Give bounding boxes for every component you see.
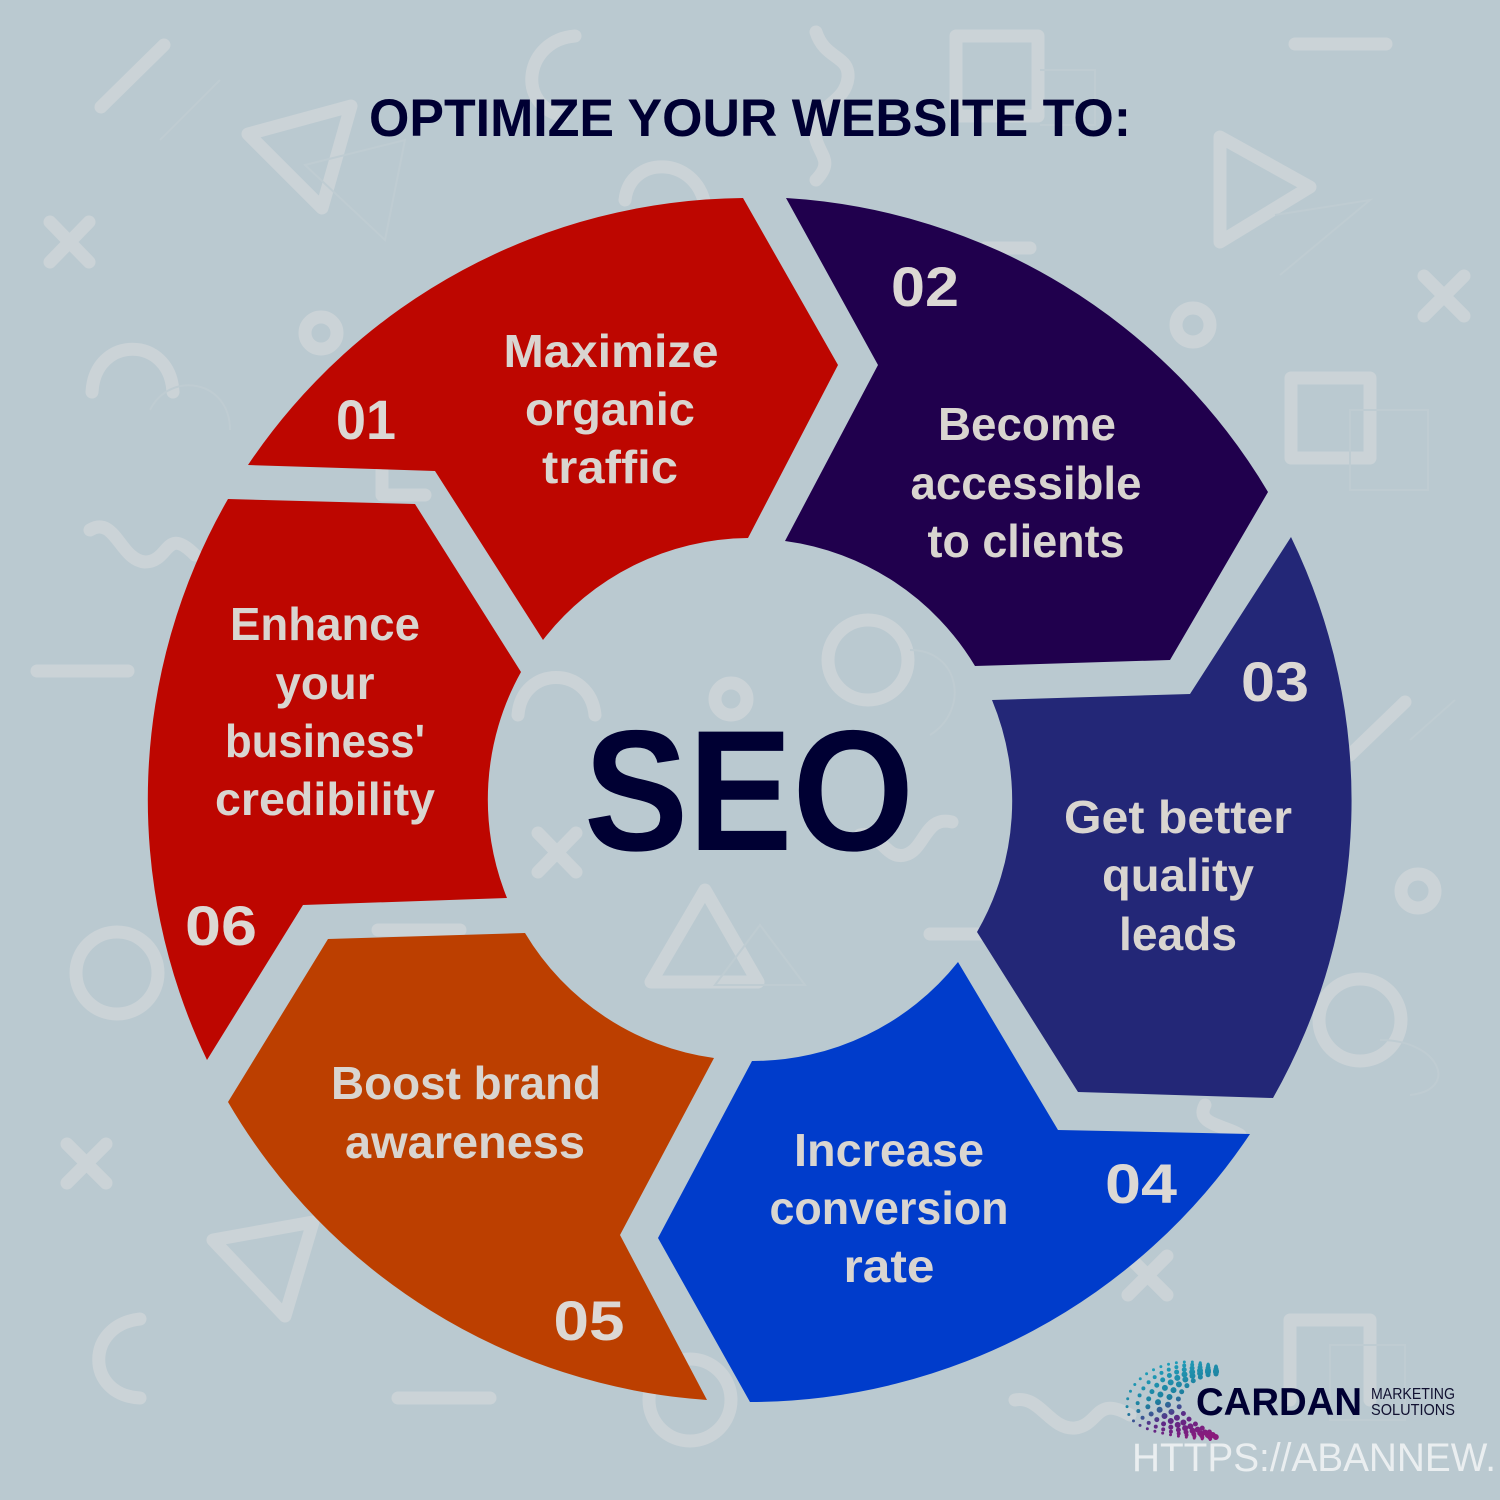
- label: enhance your business' credibility: credibility: [215, 773, 435, 825]
- segment 01: maximize organic traffic: [248, 198, 838, 640]
- number 01: 01: [336, 388, 396, 451]
- label: increase conversion rate: rate: [844, 1240, 934, 1292]
- number 05: 05: [554, 1289, 624, 1352]
- label: maximize organic traffic: traffic: [542, 441, 678, 493]
- number 04: 04: [1105, 1152, 1177, 1215]
- label: become accessible to clients: to clients: [928, 515, 1124, 567]
- label: boost brand awareness: [331, 1057, 601, 1168]
- label: boost brand awareness: awareness: [345, 1116, 585, 1168]
- label: get better quality leads: Get better: [1064, 791, 1292, 843]
- label: get better quality leads: quality: [1102, 849, 1254, 901]
- label: boost brand awareness: Boost brand: [331, 1057, 601, 1109]
- label: enhance your business' credibility: business': [225, 715, 425, 767]
- label: enhance your business' credibility: Enhance: [230, 598, 420, 650]
- number 02: 02: [891, 255, 959, 318]
- wordmark: CARDAN: [1196, 1381, 1362, 1424]
- label: enhance your business' credibility: your: [276, 657, 375, 709]
- number 03: 03: [1241, 650, 1309, 713]
- title: OPTIMIZE YOUR WEBSITE TO:: [369, 89, 1131, 148]
- number 06: 06: [185, 894, 257, 957]
- segment 02: become accessible to clients: [785, 198, 1268, 666]
- logo: Cardan Marketing Solutions: [1127, 1362, 1455, 1440]
- icon: dotted wave: [1127, 1362, 1216, 1440]
- tagline: [1371, 1386, 1455, 1419]
- label: get better quality leads: leads: [1119, 908, 1237, 960]
- label: increase conversion rate: Increase: [794, 1124, 984, 1176]
- tagline: SOLUTIONS: [1371, 1402, 1455, 1419]
- label: become accessible to clients: Become: [938, 398, 1116, 450]
- label: become accessible to clients: accessible: [910, 457, 1142, 509]
- label: maximize organic traffic: [504, 325, 718, 493]
- center label: SEO: SEO: [584, 695, 914, 887]
- segment 04: increase conversion rate: [658, 962, 1250, 1402]
- segment 03: get better quality leads: [977, 537, 1352, 1098]
- watermark url: HTTPS://ABANNEW.: [1132, 1436, 1496, 1480]
- tagline: MARKETING: [1371, 1386, 1455, 1403]
- label: become accessible to clients: [910, 398, 1142, 567]
- label: maximize organic traffic: organic: [525, 383, 695, 435]
- label: increase conversion rate: conversion: [770, 1182, 1008, 1234]
- segment 05: boost brand awareness: [228, 933, 714, 1400]
- label: get better quality leads: [1064, 791, 1292, 960]
- segment 06: enhance your business' credibility: [148, 499, 521, 1060]
- label: maximize organic traffic: Maximize: [504, 325, 718, 377]
- label: enhance your business' credibility: [215, 598, 435, 825]
- label: increase conversion rate: [770, 1124, 1008, 1292]
